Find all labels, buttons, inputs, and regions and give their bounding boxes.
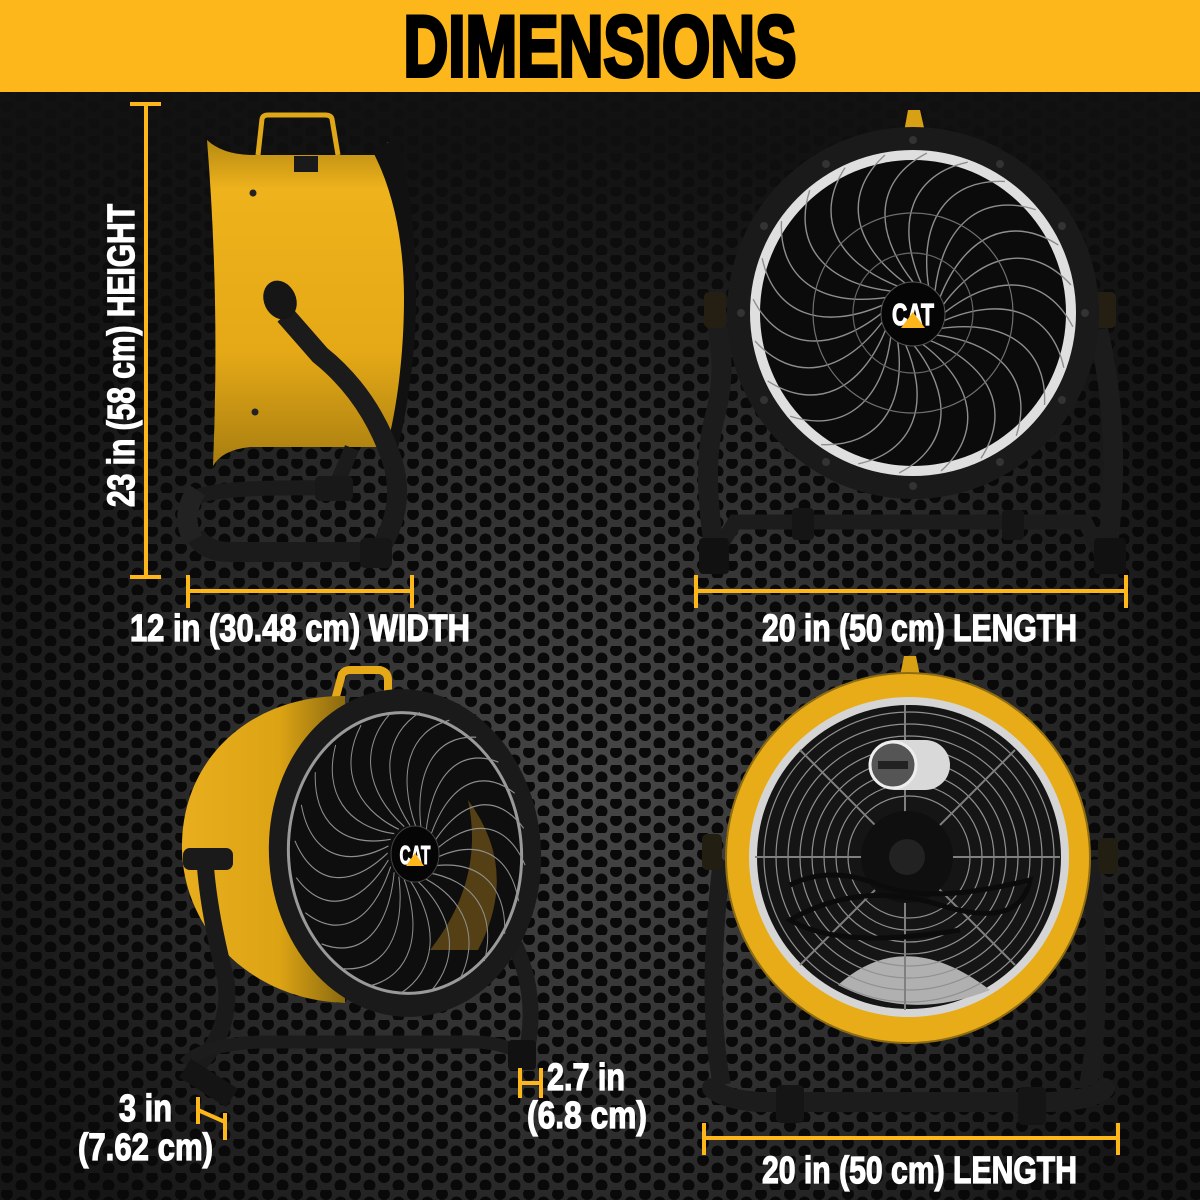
dimension: height line bbox=[130, 102, 161, 579]
CAT logo angled: CAT bbox=[400, 840, 431, 870]
power cord bbox=[790, 875, 1030, 938]
label: 2.7 in: 2.7 in bbox=[547, 1057, 625, 1099]
CAT logo bbox=[881, 282, 945, 346]
dimension: length line top bbox=[694, 575, 1128, 608]
fan front view bbox=[699, 110, 1126, 574]
label: length bottom: 20 in (50 cm) LENGTH bbox=[762, 1150, 1077, 1192]
control dial bbox=[870, 740, 950, 790]
dimension: length line bottom bbox=[702, 1123, 1120, 1155]
fan angled view bbox=[182, 670, 552, 1098]
label: length top: 20 in (50 cm) LENGTH bbox=[762, 608, 1077, 650]
dimension: foot width 3 in bbox=[198, 1097, 225, 1140]
CAT logo: CAT bbox=[892, 297, 934, 332]
label: 6.8 cm: (6.8 cm) bbox=[527, 1095, 647, 1137]
title banner: DIMENSIONS bbox=[404, 0, 796, 95]
fan side view bbox=[187, 115, 416, 568]
dimension: width line bbox=[186, 575, 414, 608]
dimension: foot width 2.7 in bbox=[520, 1068, 541, 1098]
label: height: 23 in (58 cm) HEIGHT bbox=[101, 204, 143, 507]
label: width: 12 in (30.48 cm) WIDTH bbox=[130, 608, 470, 650]
title banner bbox=[0, 0, 1200, 95]
fan rear view bbox=[702, 656, 1118, 1125]
ring bolts bbox=[737, 136, 1089, 490]
label: 7.62 cm: (7.62 cm) bbox=[78, 1127, 213, 1169]
label: 3 in: 3 in bbox=[119, 1088, 172, 1130]
CAT logo angled bbox=[391, 826, 439, 882]
